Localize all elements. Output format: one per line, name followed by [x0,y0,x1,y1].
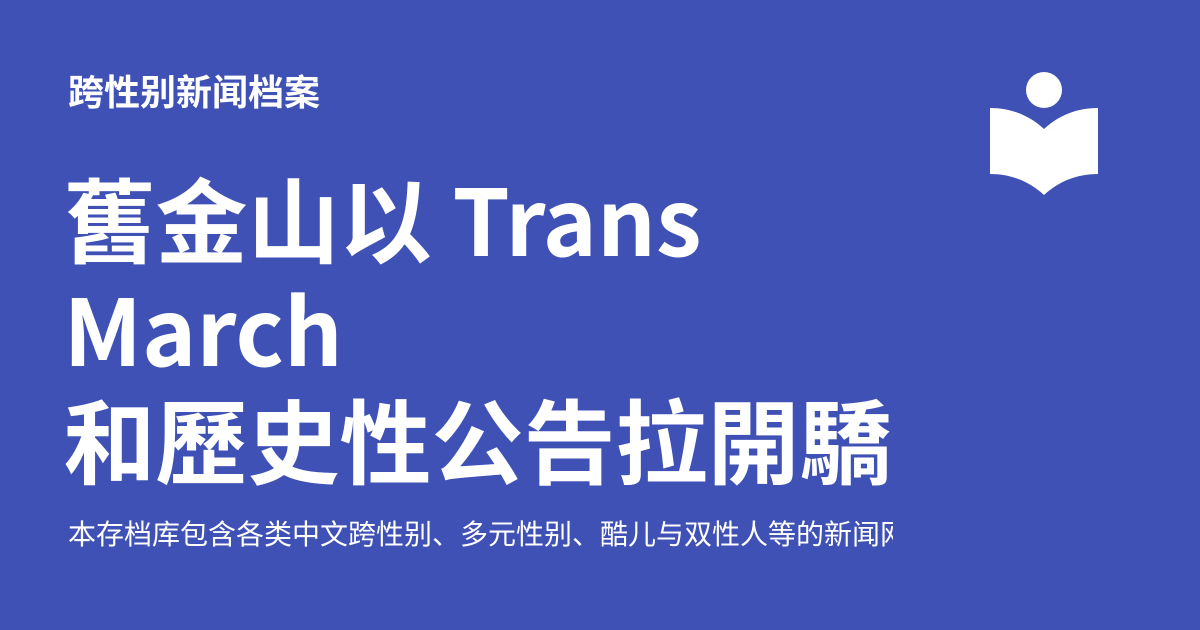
icon: reading book logo [990,72,1098,195]
title [64,162,892,494]
title: March [64,260,343,393]
site name heading: 跨性别新闻档案 [68,64,320,116]
